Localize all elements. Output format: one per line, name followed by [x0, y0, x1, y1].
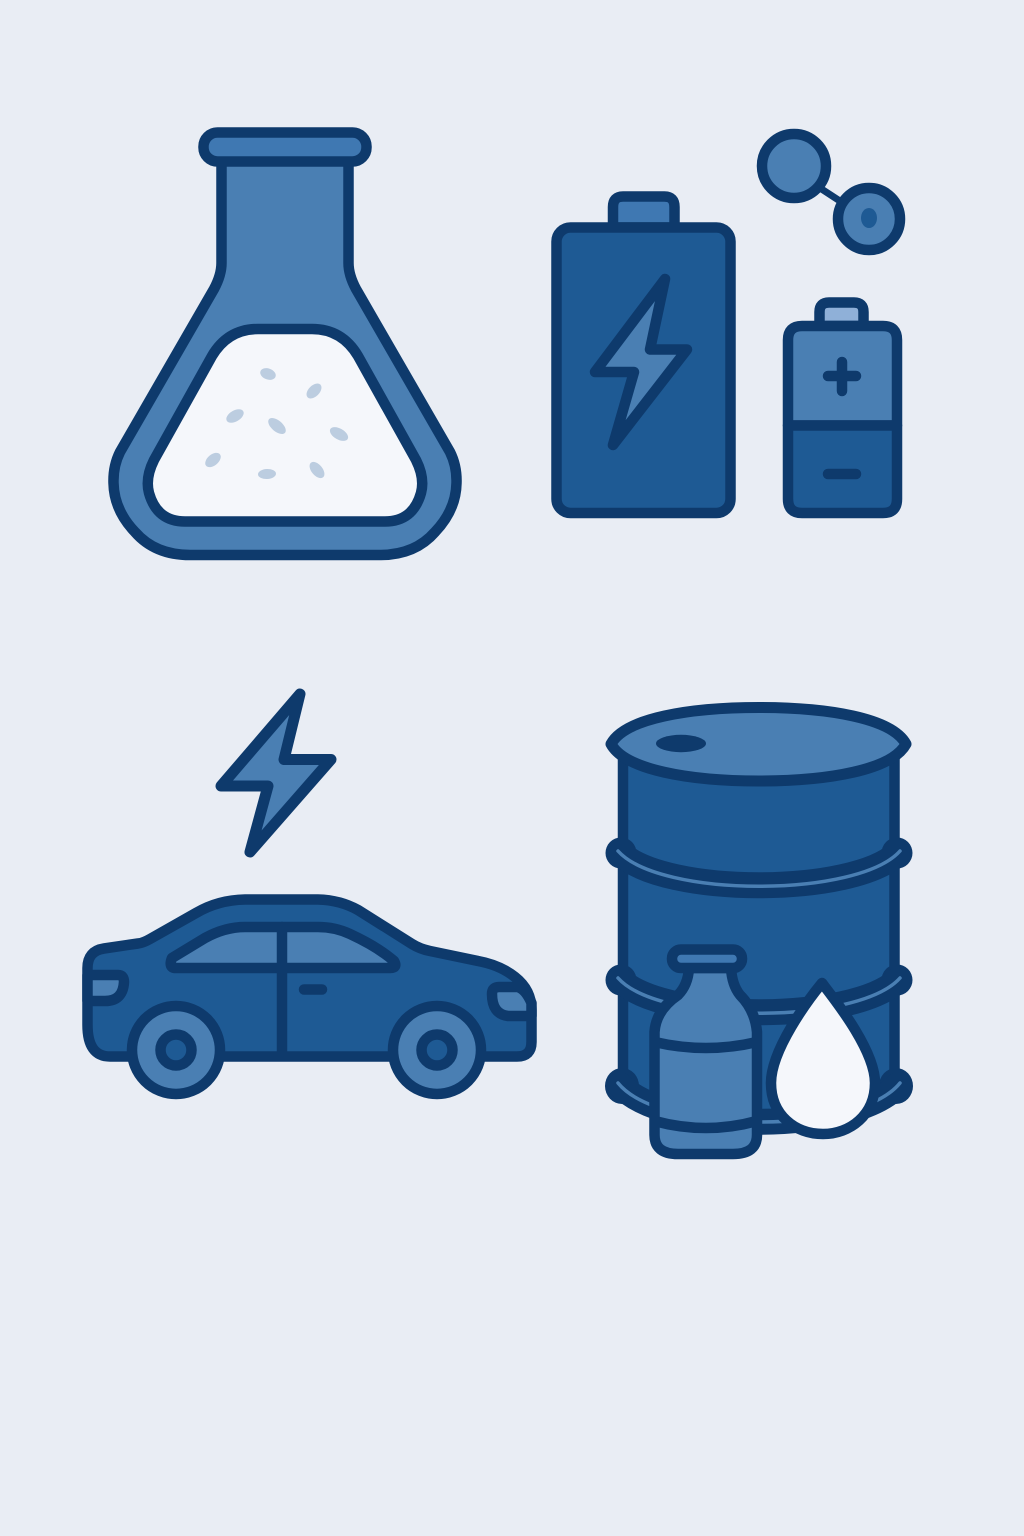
- icon: lightning bolt above car: [221, 694, 331, 852]
- icon: large battery with lightning bolt: [556, 196, 730, 513]
- icon: small battery with plus and minus: [788, 302, 897, 513]
- icon: white oil drop: [771, 983, 875, 1134]
- icon: electric car: [88, 900, 532, 1094]
- icon: oil bottle: [654, 950, 757, 1154]
- icon: molecule: [762, 134, 900, 250]
- icon: oil barrel: [605, 708, 913, 1122]
- icon: flask with white powder: [113, 132, 457, 555]
